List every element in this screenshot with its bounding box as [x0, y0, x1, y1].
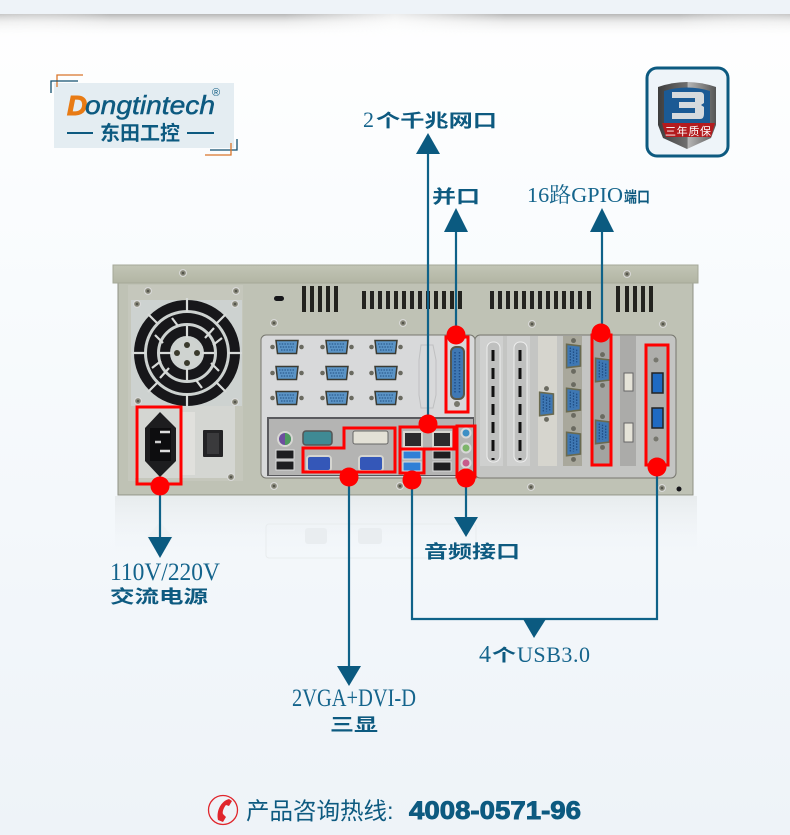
audio jacks — [462, 428, 470, 468]
row of COM ports — [270, 340, 403, 404]
callout: parallel port: 并口 — [432, 186, 480, 207]
callout: parallel port — [432, 186, 480, 344]
USB 3.0 card — [646, 345, 668, 465]
callout: power input: 交流电源 — [110, 586, 208, 607]
callout: 16 GPIO: 16路GPIO — [527, 183, 623, 207]
highlight: USB ports — [400, 449, 424, 473]
rocker switch — [203, 430, 223, 457]
hotline label: 产品咨询热线: — [246, 798, 394, 824]
callout: audio: 音频接口 — [424, 541, 520, 562]
lock slot — [274, 296, 284, 301]
USB 2.0 ports — [276, 450, 294, 470]
highlight: power socket — [137, 407, 181, 484]
logo: Dongtintech: 东田工控 — [100, 121, 180, 145]
callout: 2 gigabit LAN: 2 — [363, 107, 374, 132]
callout: display outputs — [292, 468, 416, 735]
GPIO card — [593, 336, 610, 464]
highlight: USB 3.0 card — [646, 345, 668, 465]
knockout outline — [419, 345, 436, 408]
highlight: LAN ports — [400, 427, 454, 449]
callout: power input: 110V/220V — [110, 559, 220, 586]
callout: 4 USB 3.0: 个 — [492, 646, 516, 665]
PCI slot cover 1 — [480, 336, 503, 466]
highlight: parallel port — [446, 337, 468, 412]
logo: Dongtintech: ® — [212, 87, 220, 99]
parallel port — [451, 347, 464, 407]
icon: phone — [208, 796, 238, 824]
vent group 4 — [618, 286, 651, 312]
callout: 4 USB 3.0: 4 — [479, 642, 491, 668]
PCI slot cover 2 — [507, 336, 530, 466]
highlight: GPIO ports — [592, 335, 611, 465]
callout: 16 GPIO: 端口 — [624, 189, 650, 206]
highlight: display ports — [303, 428, 395, 472]
vent group 2 — [364, 291, 460, 309]
I/O back panel — [261, 335, 475, 478]
callout: audio — [424, 468, 520, 562]
COM card — [538, 336, 557, 466]
USB card — [620, 336, 636, 466]
chassis top strip — [113, 265, 698, 283]
callout: display outputs: 三显 — [330, 715, 378, 735]
vent group 1 — [304, 286, 336, 312]
hotline number: 4008-0571-96 — [409, 797, 581, 825]
fan grille — [132, 298, 242, 408]
callout: display outputs: 2VGA+DVI-D — [292, 685, 416, 712]
USB ports on board — [433, 451, 451, 471]
PS/2 port — [277, 431, 293, 447]
callout: 2 gigabit LAN — [363, 107, 497, 434]
power supply plate — [128, 285, 243, 481]
badge: three-year warranty — [647, 68, 728, 156]
badge: three-year warranty: 三年质保 — [665, 124, 711, 138]
logo: Dongtintech — [51, 75, 237, 155]
COM port — [303, 431, 332, 445]
USB 3.0 ports on board — [403, 451, 421, 471]
callout: power input — [110, 476, 220, 607]
chassis screws — [180, 270, 682, 492]
callout: 2 gigabit LAN: 个千兆网口 — [376, 111, 497, 131]
VGA ports — [307, 456, 383, 471]
logo: Dongtintech: D — [67, 90, 87, 121]
vent group 3 — [492, 291, 589, 309]
rating label — [182, 412, 195, 475]
DVI port — [353, 431, 388, 444]
highlight: audio jacks — [457, 426, 475, 477]
callout: 4 USB 3.0 — [402, 458, 666, 668]
motherboard I/O shield — [267, 417, 474, 476]
footer: hotline — [208, 796, 581, 825]
expansion slot area — [475, 335, 676, 478]
chassis body — [118, 280, 693, 495]
top shadow band — [0, 0, 790, 28]
LAN ports — [404, 432, 451, 447]
computer chassis rear view — [113, 265, 698, 495]
reflection of chassis — [115, 496, 697, 562]
triple COM card — [563, 336, 582, 466]
callout: 4 USB 3.0: USB3.0 — [517, 642, 590, 667]
power socket — [145, 412, 176, 477]
callout: 16 GPIO — [527, 183, 650, 342]
logo: Dongtintech: ongtintech — [85, 90, 215, 120]
